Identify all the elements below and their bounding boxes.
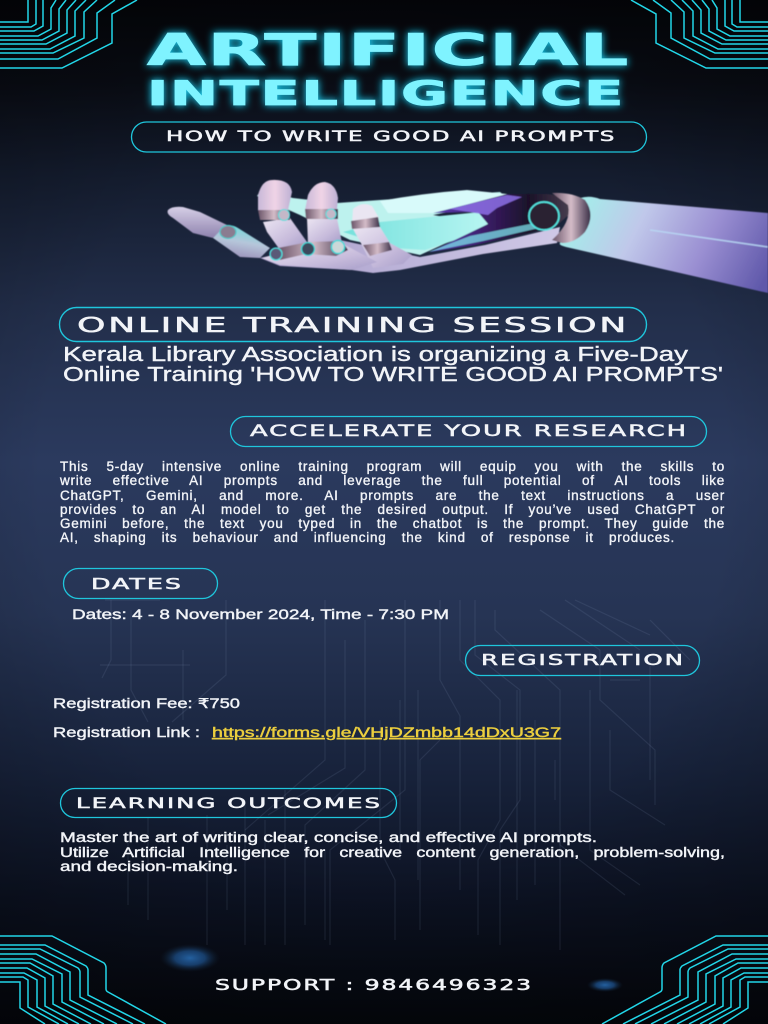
learning outcomes text: Utilize Artificial Intelligence for creative content generation, problem-solving, [60,845,725,860]
middle lower [307,218,342,244]
title: INTELLIGENCE [147,74,625,114]
dates line: Dates: 4 - 8 November 2024, Time - 7:30 PM [72,606,449,622]
white cuff [380,190,507,213]
circuit board pattern [100,600,690,950]
registration pill: REGISTRATION [481,651,685,669]
robotic hand illustration [168,180,768,293]
program description: provides to an AI model to get the desired output. If you’ve used ChatGPT or [60,502,725,517]
dark wrist [430,194,572,252]
dates pill: DATES [91,575,183,593]
registration pill [466,646,700,676]
accelerate pill: ACCELERATE YOUR RESEARCH [250,421,688,440]
program description: write effective AI prompts and leverage the full potential of AI tools like [60,473,725,488]
organizer announcement: Kerala Library Association is organizing a Five-Day [63,344,688,366]
title [147,26,630,114]
corner circuit bottom left [0,936,166,1024]
glow spot left [160,944,220,972]
index band [258,210,290,220]
finger base segment [262,245,377,270]
learning outcomes text: Master the art of writing clear, concise, and effective AI prompts. [60,830,597,845]
corner circuit top left [0,0,137,68]
corner circuit top right [631,0,768,68]
program description [60,459,725,546]
palm inner [343,212,490,250]
program description: ChatGPT, Gemini, and more. AI prompts are the text instructions a user [60,488,725,503]
back of hand [257,192,510,255]
palm lower [260,227,560,273]
glow spot right [587,978,623,992]
middle tip [305,182,338,210]
thumb joint [220,226,236,238]
forearm [560,197,768,293]
middle joint [326,209,336,219]
title: ARTIFICIAL [147,26,630,76]
wrist cyan sheen [428,222,552,252]
dates pill [64,568,218,598]
corner circuit bottom right [602,936,768,1024]
registration link label: Registration Link : [53,725,200,740]
support number: SUPPORT : 9846496323 [215,976,533,994]
knuckle joints [332,240,344,254]
forearm light streak [650,230,768,247]
ring finger band [351,217,380,229]
program description: Gemini before, the text you typed in the chatbot is the prompt. They guide the [60,516,725,531]
thumb lower [213,225,270,258]
ring finger lower [352,227,412,268]
index tip [258,180,292,210]
registration fee: Registration Fee: ₹750 [53,696,240,711]
learning outcomes pill [60,788,396,818]
index joint [278,210,290,220]
online training pill [60,308,646,342]
wrist metal ring [552,193,590,243]
online training pill: ONLINE TRAINING SESSION [77,313,629,337]
knuckle row [278,241,348,260]
learning outcomes text: and decision-making. [60,859,238,874]
middle band [305,209,338,219]
learning outcomes text [60,830,725,874]
subtitle pill: HOW TO WRITE GOOD AI PROMPTS [166,129,616,145]
thumb tip [168,207,227,238]
index lower [263,218,307,250]
accelerate pill [230,416,706,446]
organizer announcement: Online Training 'HOW TO WRITE GOOD AI PROMPTS' [63,364,723,386]
organizer announcement [63,344,723,386]
subtitle pill [132,122,646,152]
wrist cyan ring [529,202,559,230]
ring finger joint [363,242,392,256]
learning outcomes pill: LEARNING OUTCOMES [76,796,382,812]
purple sheen [450,195,522,215]
program description: AI, shaping its behaviour and influencing the kind of response it produces. [60,530,675,545]
ring finger tip [352,204,379,225]
title: ARTIFICIAL [147,26,630,76]
title: INTELLIGENCE [147,74,625,114]
program description: This 5-day intensive online training program will equip you with the skills to [60,459,725,474]
registration link: https://forms.gle/VHjDZmbb14dDxU3G7 [212,725,561,740]
